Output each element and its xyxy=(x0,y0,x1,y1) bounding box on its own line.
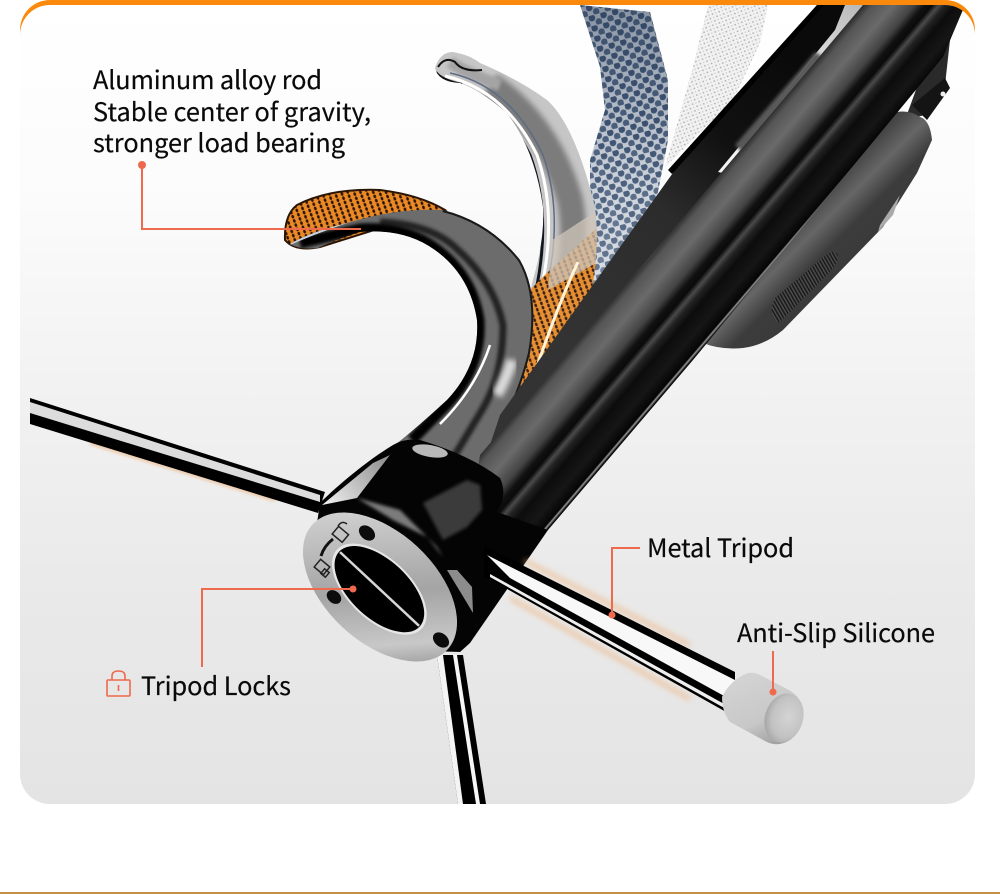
bottom tripod leg xyxy=(437,655,486,804)
callout: anti-slip silicone xyxy=(770,651,776,696)
handle body xyxy=(703,112,932,348)
silicone foot cap xyxy=(722,672,804,744)
label: metal tripod: Metal Tripod xyxy=(647,529,794,565)
label: anti-slip silicone: Anti-Slip Silicone xyxy=(737,614,935,650)
collar face ring xyxy=(303,512,458,662)
callout: tripod locks xyxy=(202,586,356,667)
text block: aluminum alloy rod: Aluminum alloy rod xyxy=(93,61,322,97)
rotation arrow on ring xyxy=(321,539,333,556)
icon: lock xyxy=(107,671,130,696)
orange top edge xyxy=(20,0,975,70)
mesh layer: white xyxy=(665,5,768,167)
main tube xyxy=(470,5,965,530)
face screw holes xyxy=(324,522,452,651)
speaker grille xyxy=(772,252,838,322)
side button xyxy=(878,195,900,232)
text block: aluminum alloy rod: Stable center of gravity, xyxy=(93,93,371,129)
mesh layer: blue honeycomb xyxy=(580,5,668,286)
callout: metal tripod xyxy=(608,548,640,618)
right tripod leg xyxy=(484,546,735,717)
label: tripod locks: Tripod Locks xyxy=(141,667,291,703)
layer: aluminum alloy shell xyxy=(290,210,534,464)
left tripod leg xyxy=(30,398,325,513)
layer: orange mesh tip xyxy=(285,190,445,248)
text block: aluminum alloy rod: stronger load bearing xyxy=(93,124,345,160)
bottom rule xyxy=(0,892,1000,894)
callout: aluminum alloy rod xyxy=(138,161,361,229)
unlock icon on ring xyxy=(332,522,349,542)
bracket xyxy=(905,40,950,120)
upper rod panel xyxy=(490,5,865,445)
lock collar xyxy=(310,440,548,652)
lock icon on ring xyxy=(314,559,330,577)
layer: silver shell xyxy=(435,52,597,388)
